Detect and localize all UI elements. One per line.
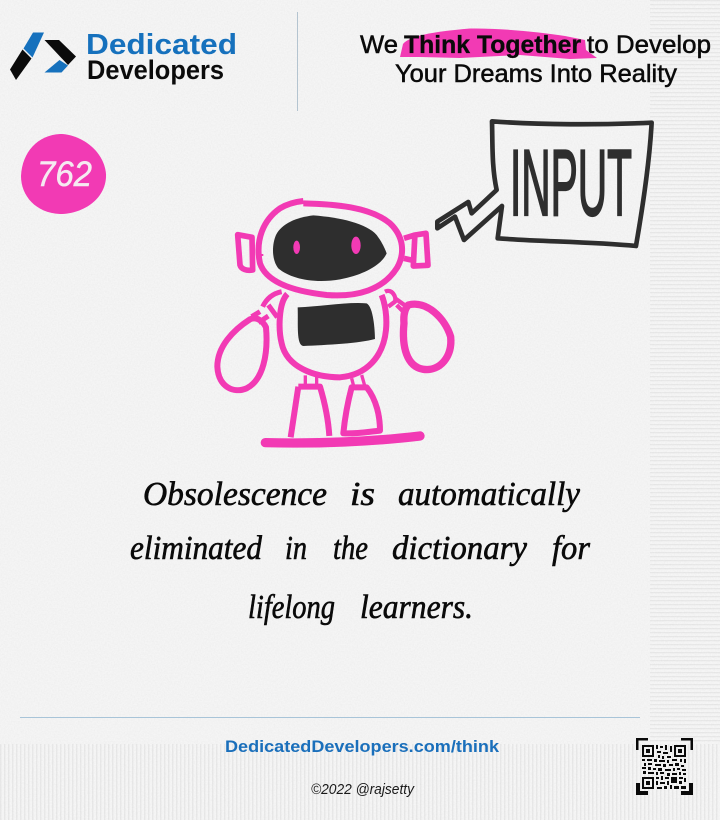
robot head [259,201,402,295]
qr finder patterns [642,745,686,789]
quote line one: automatically [398,476,581,513]
quote line one [143,476,581,513]
robot left arm [217,292,282,390]
tagline line one: Think Together [404,31,581,59]
tagline line one: We [360,31,398,59]
quote line two: eliminated [130,530,263,567]
tagline [360,28,711,88]
quote line one: is [350,476,375,513]
tagline line one: to Develop [587,31,711,59]
quote line three [248,589,473,626]
robot ground line [265,436,420,443]
tagline line two: Your Dreams Into Reality [395,60,678,88]
tagline line one [360,31,711,59]
brush highlight [400,28,597,59]
qr modules [642,745,686,789]
qr corners [636,738,693,795]
logo wordmark: Dedicated [86,29,237,61]
footer url: DedicatedDevelopers.com/think [225,737,500,756]
quote line two [130,530,591,567]
quote line two: for [552,530,591,567]
quote line three: lifelong [248,589,335,626]
quote line two: dictionary [392,530,528,567]
robot body [280,294,386,377]
logo icon [10,32,76,80]
number badge [21,134,106,214]
quote [130,476,591,626]
quote line one: Obsolescence [143,476,327,513]
robot legs [291,375,380,437]
robot right arm [385,291,451,370]
quote line two: the [333,530,368,567]
qr code [636,738,693,795]
bubble outline [437,121,652,246]
logo wordmark: Developers [87,55,224,85]
number badge: 762 [37,155,92,194]
copyright: ©2022 @rajsetty [311,782,415,798]
quote line two: in [285,530,307,567]
quote line three: learners. [360,589,473,626]
logo [10,29,237,85]
logo wordmark [86,29,237,85]
speech bubble: input [437,121,652,246]
robot ears [238,233,428,270]
robot [217,201,451,443]
